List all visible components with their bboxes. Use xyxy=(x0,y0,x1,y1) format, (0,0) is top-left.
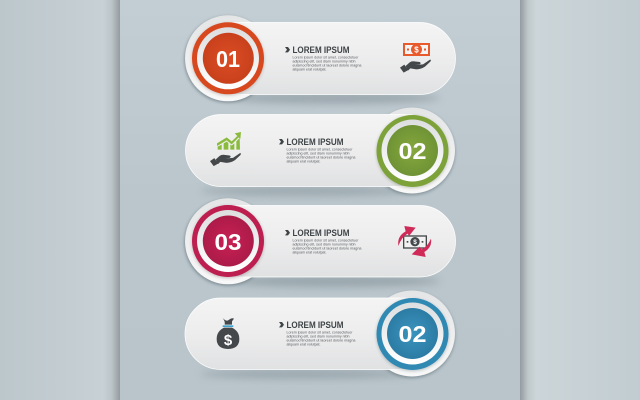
heading 04: LOREM IPSUM xyxy=(286,319,344,330)
panel: step 03 xyxy=(184,198,456,287)
icon: money bag xyxy=(217,318,239,349)
icon: banknote in hand: $ xyxy=(414,45,419,54)
body text 04: adipiscing elit, sed diam nonummy nibh xyxy=(286,334,350,339)
icon: money bag: $ xyxy=(224,332,233,349)
heading 01: LOREM IPSUM xyxy=(292,44,350,55)
badge 02 blue: 02 xyxy=(398,321,426,347)
body text 03: adipiscing elit, sed diam nonummy nibh xyxy=(292,242,356,247)
badge 02 green: 02 xyxy=(398,138,426,164)
badge 01 xyxy=(192,22,264,95)
icon: banknote in hand xyxy=(400,43,431,73)
center panel shadows xyxy=(103,0,536,400)
panel: step 04 blue xyxy=(185,290,455,379)
panel: step 01 xyxy=(184,15,456,104)
heading 02: LOREM IPSUM xyxy=(286,136,344,147)
center panel xyxy=(120,0,520,400)
body text 01: Lorem ipsum dolor sit amet, consectetuer xyxy=(292,55,359,60)
body text 03: Lorem ipsum dolor sit amet, consectetuer xyxy=(292,238,359,243)
badge 02 green xyxy=(376,115,448,188)
body text 03 xyxy=(292,238,362,255)
icon: money exchange arrows xyxy=(398,226,431,257)
body text 04: aliquam erat volutpat. xyxy=(286,342,320,347)
body text 04: euismod tincidunt ut laoreet dolore magna xyxy=(286,338,356,342)
badge 02 blue xyxy=(376,298,448,371)
body text 01: adipiscing elit, sed diam nonummy nibh xyxy=(292,59,356,64)
body text 04: Lorem ipsum dolor sit amet, consectetuer xyxy=(286,330,353,335)
body text 04 xyxy=(286,330,356,347)
icon: money exchange arrows: $ xyxy=(413,239,417,246)
badge 03 xyxy=(192,205,264,278)
body text 03: aliquam erat volutpat. xyxy=(292,250,326,255)
body text 02 xyxy=(286,147,356,164)
body text 02: Lorem ipsum dolor sit amet, consectetuer xyxy=(286,147,353,152)
body text 01 xyxy=(292,55,362,72)
panel: step 02 green xyxy=(186,108,455,196)
body text 01: aliquam erat volutpat. xyxy=(292,67,326,72)
body text 02: adipiscing elit, sed diam nonummy nibh xyxy=(286,151,350,156)
icon: growth chart in hand xyxy=(210,132,241,166)
body text 01: euismod tincidunt ut laoreet dolore magna xyxy=(292,62,362,68)
body text 02: aliquam erat volutpat. xyxy=(286,159,320,164)
badge 01: 01 xyxy=(216,46,240,72)
badge 03: 03 xyxy=(214,229,242,255)
body text 02: euismod tincidunt ut laoreet dolore magna xyxy=(286,154,356,160)
heading 03: LOREM IPSUM xyxy=(292,227,350,238)
body text 03: euismod tincidunt ut laoreet dolore magna xyxy=(292,246,362,250)
